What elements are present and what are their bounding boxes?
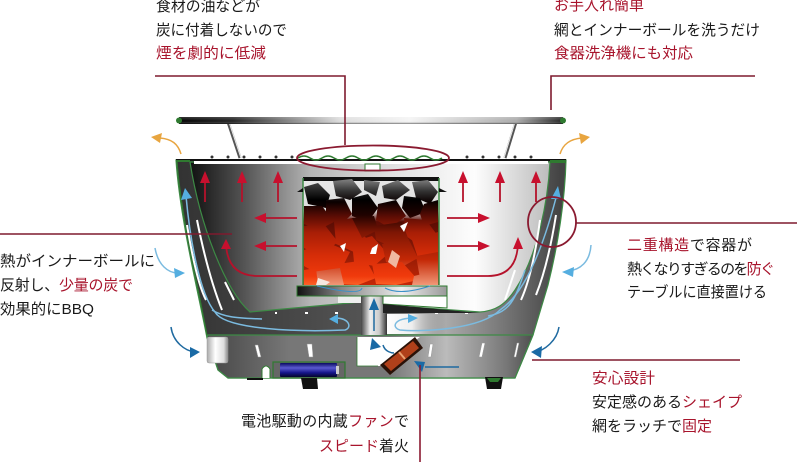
heading text: battery fan: 電池駆動の内蔵ファンで bbox=[241, 413, 409, 430]
red heat arrows left bbox=[200, 171, 297, 276]
lower chamber wedge bbox=[338, 296, 480, 313]
heading text: easy cleaning: 網とインナーボールを洗うだけ bbox=[554, 22, 760, 39]
callout leader: easy cleaning bbox=[551, 76, 755, 110]
rim bbox=[176, 159, 566, 161]
outer wall bbox=[176, 160, 566, 378]
callout leader: double wall bbox=[576, 222, 797, 224]
heading text: safe design bbox=[592, 370, 742, 435]
charcoal pieces bbox=[304, 179, 438, 285]
heading text: smoke reduction: 煙を劇的に低減 bbox=[156, 45, 266, 62]
callout leader: safe design bbox=[532, 359, 740, 361]
heading text: battery fan bbox=[241, 413, 409, 455]
callout ellipse: grill net bbox=[297, 146, 449, 170]
fan housing bbox=[357, 337, 420, 366]
dark blue air flow arrows bbox=[171, 298, 559, 372]
heading text: heat reflection: 反射し、少量の炭で bbox=[0, 277, 133, 294]
chimney bbox=[361, 288, 387, 335]
heading text: double structure bbox=[627, 237, 775, 301]
heading text: double structure: 二重構造で容器が bbox=[627, 237, 752, 254]
air chamber bbox=[385, 314, 445, 334]
heading text: battery fan: スピード着火 bbox=[319, 438, 409, 455]
heading text: heat reflection: 効果的にBBQ bbox=[0, 301, 94, 318]
heading text: double structure: テーブルに直接置ける bbox=[627, 283, 767, 301]
heading text: safe design: 安定感のあるシェイプ bbox=[592, 394, 742, 411]
grill lid bar bbox=[176, 117, 566, 158]
battery compartment bbox=[273, 362, 345, 378]
charcoal basket bbox=[297, 177, 447, 285]
heading text: easy cleaning: 食器洗浄機にも対応 bbox=[554, 45, 693, 62]
grill net bbox=[210, 156, 532, 171]
heading text: safe design: 安心設計 bbox=[592, 370, 655, 387]
inner bowl bbox=[190, 162, 550, 312]
wall vent stripes bbox=[187, 215, 556, 313]
heading text: heat reflection: 熱がインナーボールに bbox=[0, 253, 155, 270]
base bbox=[207, 335, 533, 378]
heading text: heat reflection bbox=[0, 253, 155, 318]
feet bbox=[247, 366, 503, 389]
bowl cross section bbox=[176, 159, 566, 378]
callout circle: double wall bbox=[528, 197, 576, 247]
heading text: smoke reduction bbox=[156, 0, 287, 62]
heading text: double structure: 熱くなりすぎるのを防ぐ bbox=[627, 261, 775, 278]
orange exhaust arrows bbox=[151, 133, 590, 154]
callout leader: fan bbox=[419, 365, 421, 462]
light blue air flow arrows bbox=[155, 186, 591, 331]
red heat arrows right bbox=[447, 171, 541, 276]
fan bbox=[380, 337, 423, 375]
heading text: smoke reduction: 炭に付着しないので bbox=[156, 22, 287, 39]
callout leader: reflection bbox=[0, 233, 232, 235]
heading text: safe design: 網をラッチで固定 bbox=[592, 418, 712, 435]
air intake cylinder bbox=[207, 337, 228, 363]
base slots bbox=[255, 343, 519, 357]
callout leader: smoke bbox=[155, 76, 345, 145]
heading text: easy cleaning bbox=[554, 0, 760, 62]
charcoal grate bbox=[297, 286, 447, 296]
